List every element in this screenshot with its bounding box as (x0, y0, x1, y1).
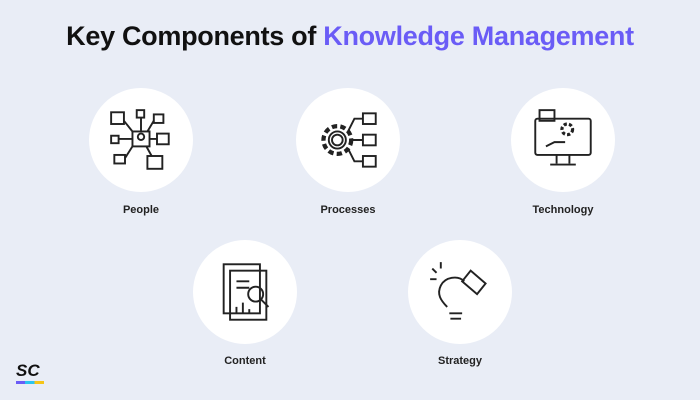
panel: processes (296, 88, 400, 192)
label: content: Content (224, 355, 266, 367)
label: processes: Processes (320, 204, 376, 216)
title: Key Components of Knowledge Management (66, 21, 634, 51)
label: technology: Technology (533, 204, 593, 216)
logo: SC (16, 361, 40, 380)
logo (16, 361, 44, 384)
panel: technology (511, 88, 615, 192)
panel: content (193, 240, 297, 344)
label: people: People (123, 204, 159, 216)
panel: strategy (408, 240, 512, 344)
panel: people (89, 88, 193, 192)
label: strategy: Strategy (438, 355, 482, 367)
